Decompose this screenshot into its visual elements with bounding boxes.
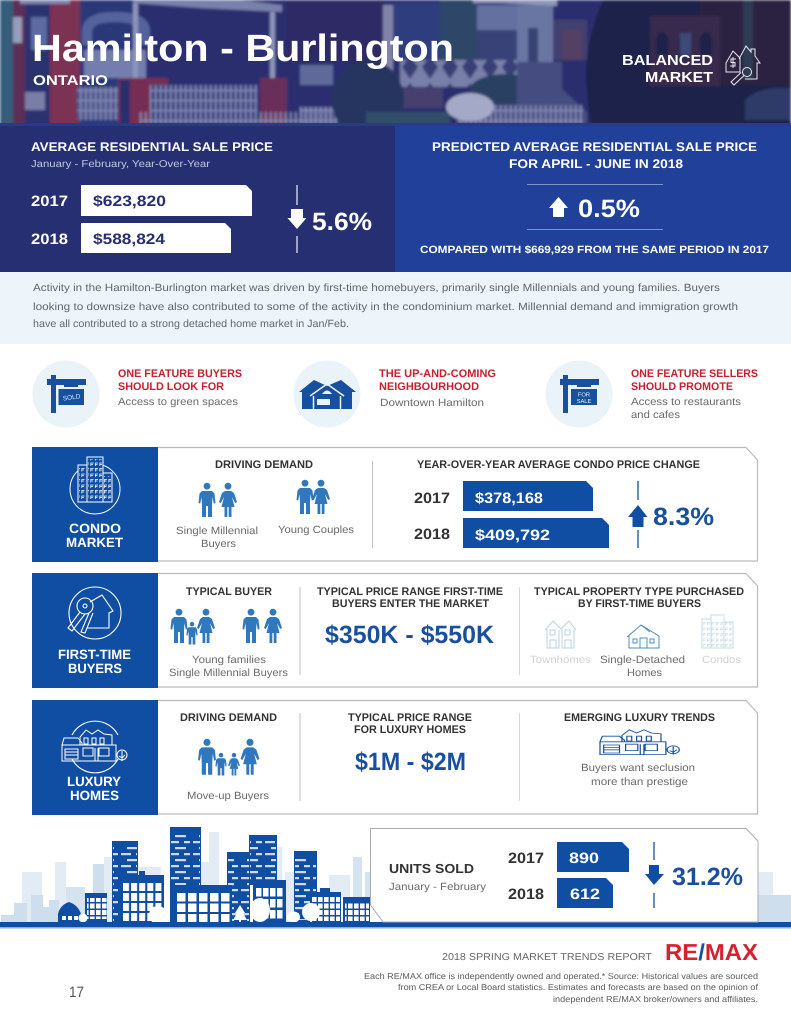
panel: first-time buyers: TYPICAL BUYER bbox=[186, 586, 272, 598]
icon: sold sign: SOLD bbox=[62, 393, 81, 403]
change: down 31.2% bbox=[645, 842, 743, 908]
icon: estate house bbox=[600, 730, 679, 755]
disclaimer: independent RE/MAX broker/owners and affiliates. bbox=[553, 994, 758, 1004]
feature: neighbourhood: THE UP-AND-COMING bbox=[379, 368, 496, 380]
panel: average residential sale price: AVERAGE RESIDENTIAL SALE PRICE bbox=[31, 140, 273, 154]
change: down 5.6%: 5.6% bbox=[312, 208, 372, 236]
panel: first-time buyers: Homes bbox=[627, 667, 662, 679]
panel: luxury homes: $1M - $2M bbox=[355, 748, 466, 776]
icon: move-up family bbox=[198, 739, 259, 775]
icon: single buyers bbox=[242, 609, 282, 643]
2018 units bar: 2018 bbox=[508, 886, 544, 903]
title: Hamilton - Burlington bbox=[32, 28, 454, 70]
feature: buyers: SHOULD LOOK FOR bbox=[118, 381, 224, 393]
panel: predicted average price bbox=[395, 126, 791, 272]
icon: house and key bbox=[726, 46, 760, 85]
icon: townhomes bbox=[545, 621, 576, 648]
panel: units sold bbox=[370, 828, 758, 922]
skyline illustration bbox=[0, 827, 791, 928]
RE/MAX logo: RE/MAX bbox=[665, 939, 759, 965]
header photo bbox=[0, 0, 791, 140]
tower windows bbox=[113, 832, 316, 921]
background buildings bbox=[22, 832, 791, 922]
market label: BALANCED bbox=[622, 53, 713, 69]
panel: condo market: CONDO bbox=[69, 521, 121, 536]
panel: first-time buyers bbox=[32, 573, 758, 688]
2018 price bar: 2018 bbox=[31, 231, 68, 248]
panel: units sold: January - February bbox=[389, 881, 487, 893]
icon: houses bbox=[294, 360, 360, 428]
intro text: Activity in the Hamilton-Burlington market was driven by first-time homebuyers, primarily single Millennials and young families. Buyers bbox=[33, 282, 720, 294]
icon: luxury house bbox=[62, 721, 127, 773]
low-rise buildings bbox=[122, 871, 370, 923]
panel: predicted average price: FOR APRIL - JUNE IN 2018 bbox=[509, 157, 683, 171]
panel: first-time buyers: FIRST-TIME bbox=[58, 647, 131, 662]
icon: condos bbox=[702, 615, 733, 648]
feature: neighbourhood bbox=[294, 360, 496, 428]
panel: units sold: UNITS SOLD bbox=[389, 861, 474, 876]
feature: buyers: Access to green spaces bbox=[118, 396, 238, 408]
panel: first-time buyers: TYPICAL PRICE RANGE FIRST-TIME bbox=[317, 586, 503, 598]
panel: first-time buyers: Townhomes bbox=[530, 654, 591, 666]
panel: luxury homes: Move-up Buyers bbox=[187, 790, 269, 802]
feature: buyers: ONE FEATURE BUYERS bbox=[118, 368, 242, 380]
market label bbox=[622, 53, 713, 86]
2017 price bar bbox=[31, 185, 252, 216]
change: up 8.3%: 8.3% bbox=[653, 503, 714, 531]
panel: condo market: MARKET bbox=[66, 535, 124, 550]
panel: luxury homes: DRIVING DEMAND bbox=[180, 712, 277, 724]
panel: luxury homes: HOMES bbox=[70, 788, 119, 803]
feature: buyers bbox=[32, 360, 242, 428]
panel: luxury homes: TYPICAL PRICE RANGE bbox=[348, 712, 472, 724]
panel: condo market: Single Millennial bbox=[176, 525, 258, 537]
panel: first-time buyers: BY FIRST-TIME BUYERS bbox=[578, 598, 701, 610]
panel: luxury homes: EMERGING LUXURY TRENDS bbox=[564, 712, 715, 724]
panel: first-time buyers: Young families bbox=[192, 654, 266, 666]
intro text: have all contributed to a strong detached home market in Jan/Feb. bbox=[33, 318, 349, 330]
panel: condo market: YEAR-OVER-YEAR AVERAGE CONDO PRICE CHANGE bbox=[417, 459, 700, 471]
2017 condo bar: $378,168 bbox=[475, 490, 543, 507]
panel: predicted average price: PREDICTED AVERAGE RESIDENTIAL SALE PRICE bbox=[432, 140, 757, 154]
2017 condo bar: 2017 bbox=[414, 490, 450, 507]
icon: sold sign bbox=[32, 360, 100, 428]
2017 units bar: 2017 bbox=[508, 850, 544, 867]
2018 price bar bbox=[31, 223, 231, 253]
icon: detached home bbox=[627, 625, 659, 648]
2018 units bar: 612 bbox=[570, 886, 600, 903]
feature: neighbourhood: Downtown Hamilton bbox=[380, 397, 484, 409]
feature: sellers: Access to restaurants bbox=[631, 396, 741, 408]
feature: sellers: SHOULD PROMOTE bbox=[631, 381, 733, 393]
icon: keys and house bbox=[68, 587, 121, 639]
icon: young couple bbox=[296, 480, 330, 514]
feature: sellers bbox=[546, 360, 758, 428]
panel: luxury homes: Buyers want seclusion bbox=[581, 762, 695, 774]
intro text: looking to downsize have also contributed to some of the activity in the condominium market. Millennial demand and immigration growth bbox=[33, 301, 738, 313]
panel: luxury homes: FOR LUXURY HOMES bbox=[354, 724, 466, 736]
2017 condo bar bbox=[414, 481, 593, 511]
icon: for sale sign: SALE bbox=[577, 398, 592, 405]
disclaimer bbox=[364, 971, 759, 1004]
panel: first-time buyers: Condos bbox=[702, 654, 741, 666]
feature: sellers: ONE FEATURE SELLERS bbox=[631, 368, 758, 380]
panel: first-time buyers: $350K - $550K bbox=[325, 621, 494, 649]
panel: predicted average price: COMPARED WITH $669,929 FROM THE SAME PERIOD IN 2017 bbox=[420, 244, 769, 256]
building windows bbox=[62, 883, 369, 922]
change: down 31.2%: 31.2% bbox=[672, 863, 743, 891]
panel: first-time buyers: TYPICAL PROPERTY TYPE PURCHASED bbox=[534, 586, 744, 598]
panel: condo market: DRIVING DEMAND bbox=[215, 459, 313, 471]
panel: average residential sale price bbox=[0, 126, 395, 272]
icon: for sale sign: FOR bbox=[578, 392, 590, 398]
panel: luxury homes bbox=[32, 700, 758, 815]
icon: young family bbox=[170, 609, 215, 644]
2017 units bar bbox=[508, 842, 629, 872]
2017 price bar: $623,820 bbox=[93, 193, 166, 210]
panel: average residential sale price: January - February, Year-Over-Year bbox=[31, 159, 211, 170]
foreground buildings bbox=[58, 827, 317, 923]
intro text bbox=[0, 272, 791, 344]
panel: condo market: Buyers bbox=[201, 538, 236, 550]
panel: first-time buyers: BUYERS bbox=[68, 661, 122, 676]
2018 condo bar: 2018 bbox=[414, 526, 450, 543]
trees bbox=[78, 898, 320, 926]
2017 price bar: 2017 bbox=[31, 193, 68, 210]
2018 condo bar bbox=[414, 518, 609, 548]
2017 units bar: 890 bbox=[569, 850, 599, 867]
market label: MARKET bbox=[645, 70, 713, 86]
change: down 5.6% bbox=[288, 185, 372, 253]
panel: first-time buyers: BUYERS ENTER THE MARKET bbox=[332, 598, 489, 610]
panel: luxury homes: more than prestige bbox=[591, 776, 688, 788]
feature: neighbourhood: NEIGHBOURHOOD bbox=[379, 381, 479, 393]
panel: first-time buyers: Single Millennial Buyers bbox=[169, 667, 288, 679]
report name: 2018 SPRING MARKET TRENDS REPORT bbox=[442, 952, 652, 963]
panel: condo market: Young Couples bbox=[278, 524, 354, 536]
feature: sellers: and cafes bbox=[631, 409, 680, 421]
panel: luxury homes: LUXURY bbox=[67, 774, 121, 789]
change: up 8.3% bbox=[628, 481, 714, 548]
panel: condo market bbox=[32, 447, 758, 562]
disclaimer: Each RE/MAX office is independently owned and operated.* Source: Historical values are sourced bbox=[364, 971, 758, 981]
change: up 0.5%: 0.5% bbox=[578, 195, 640, 223]
change: up 0.5% bbox=[549, 195, 640, 223]
icon: condo towers bbox=[70, 457, 120, 514]
subtitle: ONTARIO bbox=[33, 72, 108, 88]
disclaimer: from CREA or Local Board statistics. Estimates and forecasts are based on the opinion of bbox=[398, 982, 759, 992]
icon: single buyers bbox=[198, 483, 237, 517]
page number: 17 bbox=[69, 984, 84, 1001]
panel: first-time buyers: Single-Detached bbox=[600, 654, 685, 666]
icon: for sale sign bbox=[546, 360, 612, 428]
2018 units bar bbox=[508, 878, 613, 908]
2018 condo bar: $409,792 bbox=[475, 527, 550, 544]
2018 price bar: $588,824 bbox=[93, 231, 166, 248]
